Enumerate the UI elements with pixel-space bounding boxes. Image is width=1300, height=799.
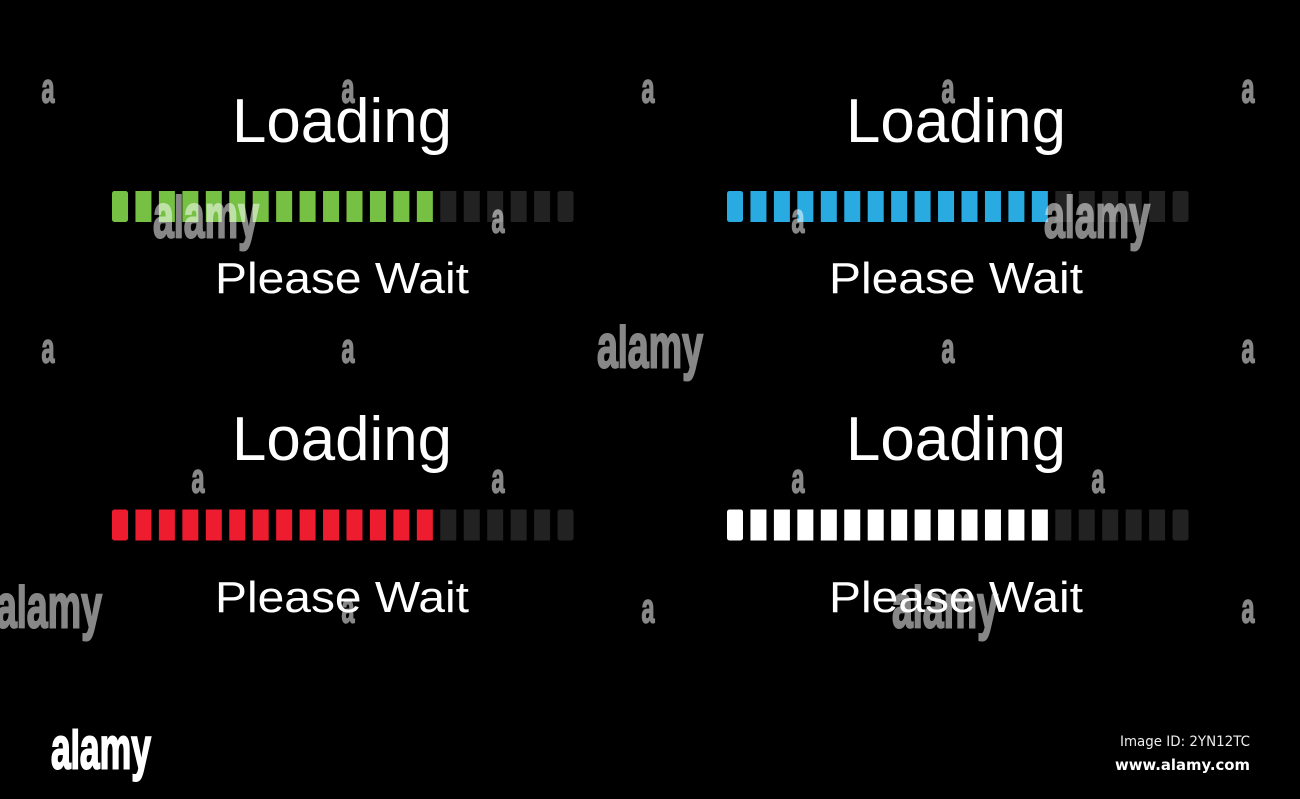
watermarks: small a marks: a xyxy=(792,194,805,242)
watermarks: large alamy marks xyxy=(0,182,1150,642)
watermarks: large alamy marks: alamy xyxy=(0,572,102,642)
progress bar: blue xyxy=(727,191,1189,222)
watermarks: small a marks: a xyxy=(492,454,505,502)
watermarks: small a marks: a xyxy=(492,194,505,242)
panel: white loader xyxy=(727,405,1189,622)
watermarks: small a marks: a xyxy=(1242,584,1255,632)
watermarks: small a marks: a xyxy=(642,584,655,632)
watermarks: large alamy marks: alamy xyxy=(597,312,703,382)
watermarks: large alamy marks: alamy xyxy=(1044,182,1150,252)
panel: blue loader xyxy=(727,87,1189,303)
watermarks: small a marks: a xyxy=(42,64,55,112)
watermarks: small a marks xyxy=(42,64,1255,632)
heading: loading: Loading xyxy=(846,405,1066,474)
watermarks: small a marks: a xyxy=(1242,64,1255,112)
watermarks: small a marks: a xyxy=(192,454,205,502)
panel: red loader xyxy=(112,405,574,622)
website url: www.alamy.com xyxy=(1115,756,1250,774)
watermarks: small a marks: a xyxy=(1092,454,1105,502)
watermarks: small a marks: a xyxy=(942,64,955,112)
progress bar: green xyxy=(112,191,574,222)
watermarks: small a marks: a xyxy=(792,454,805,502)
logo: alamy: alamy xyxy=(51,716,151,782)
watermarks: large alamy marks: alamy xyxy=(892,572,998,642)
heading: loading: Loading xyxy=(846,87,1066,156)
watermarks: small a marks: a xyxy=(1242,324,1255,372)
watermarks: small a marks: a xyxy=(942,324,955,372)
watermarks: small a marks: a xyxy=(342,324,355,372)
progress bar: red xyxy=(112,510,574,540)
text: please wait: Please Wait xyxy=(829,573,1083,622)
watermarks: small a marks: a xyxy=(342,584,355,632)
panel: green loader xyxy=(112,87,574,303)
heading: loading: Loading xyxy=(232,87,452,156)
watermarks: small a marks: a xyxy=(642,64,655,112)
text: please wait: Please Wait xyxy=(215,573,469,622)
watermarks: small a marks: a xyxy=(342,64,355,112)
progress bar: white xyxy=(727,510,1189,540)
heading: loading: Loading xyxy=(232,405,452,474)
text: please wait: Please Wait xyxy=(829,254,1083,303)
text: please wait: Please Wait xyxy=(215,254,469,303)
image id: Image ID: 2YN12TC xyxy=(1120,734,1250,750)
watermarks: large alamy marks: alamy xyxy=(153,182,259,252)
watermarks: small a marks: a xyxy=(42,324,55,372)
